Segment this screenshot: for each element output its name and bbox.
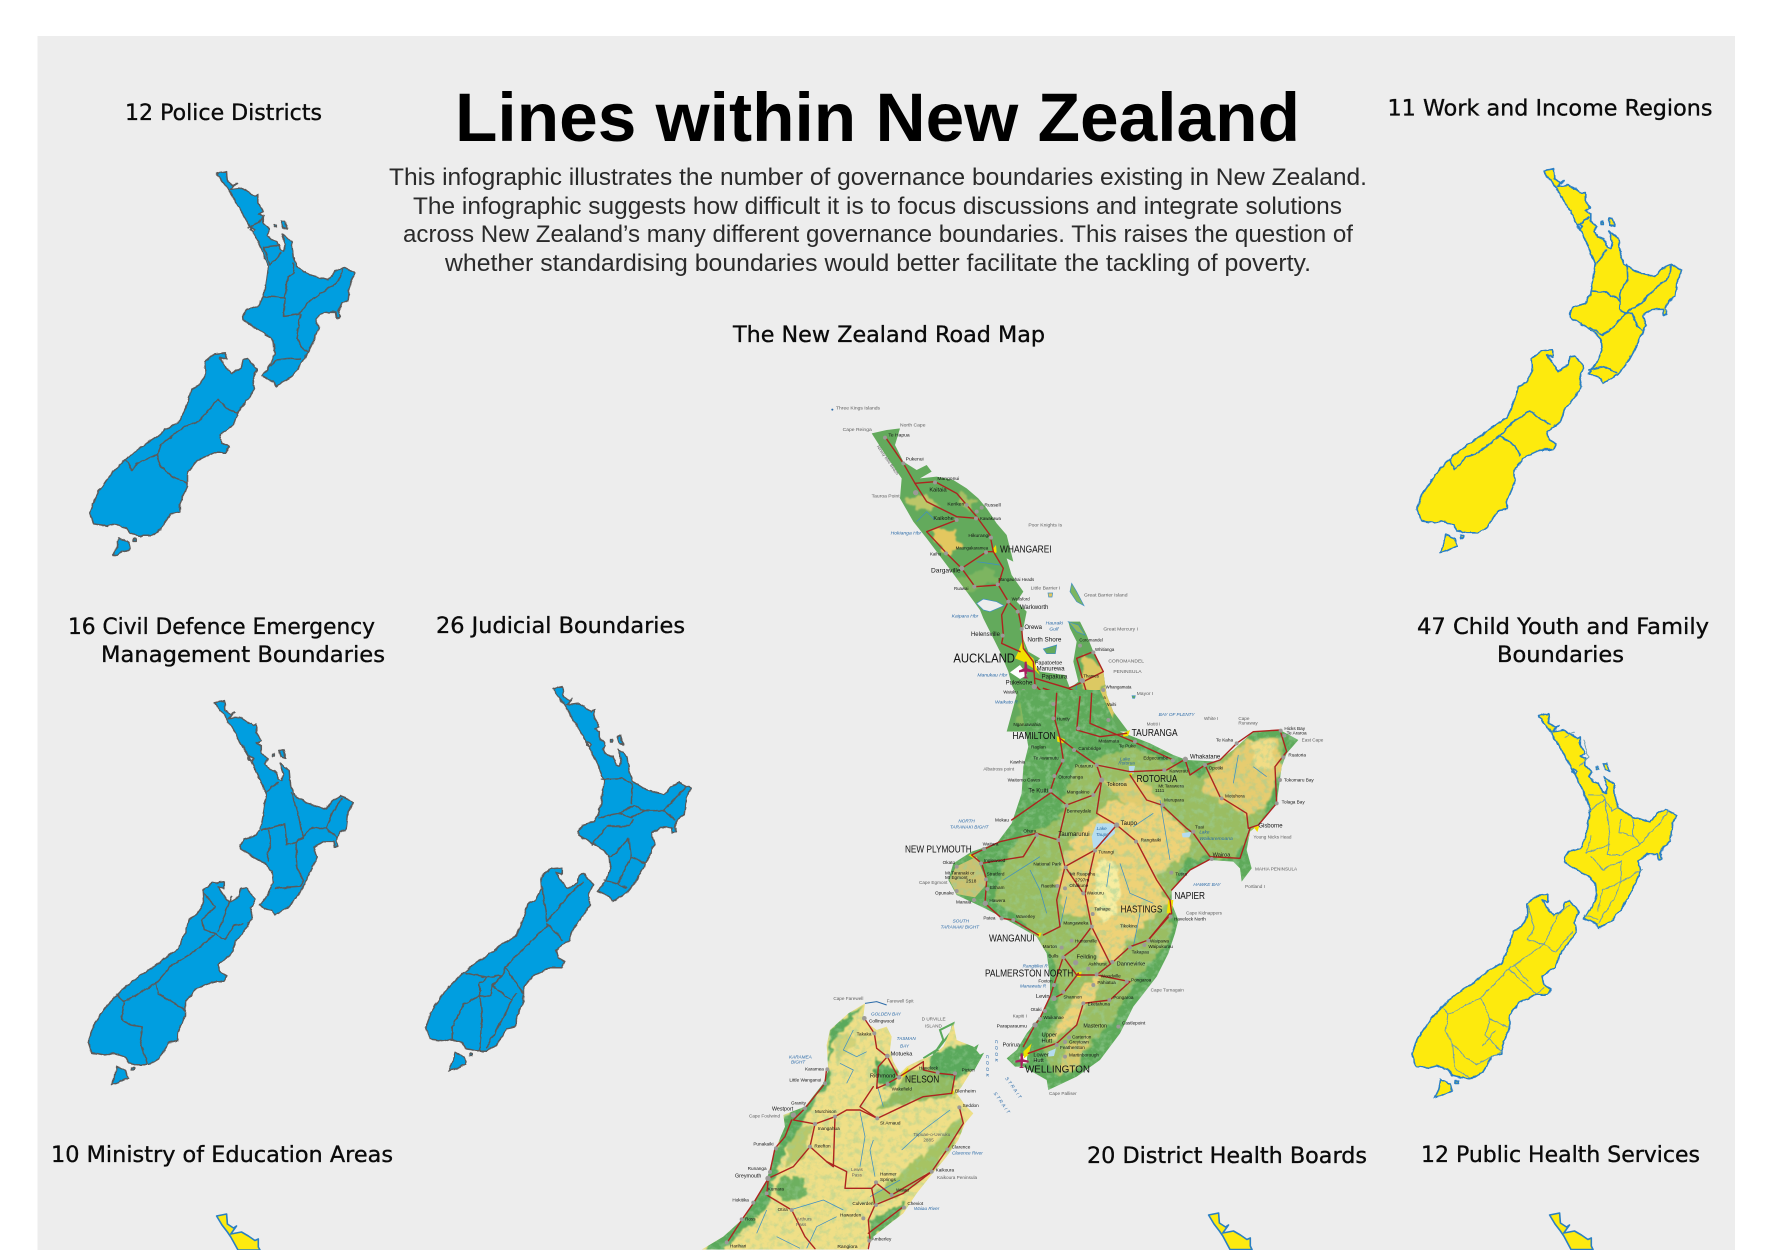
central place names: Taupo bbox=[1121, 821, 1138, 827]
central place names: Havelock North bbox=[1174, 916, 1206, 921]
north place names: Papatoetoe bbox=[1035, 661, 1062, 667]
central place names: National Park bbox=[1033, 862, 1062, 867]
north place names: Pukenui bbox=[906, 457, 924, 463]
north place names: Te Kauwhata bbox=[1052, 697, 1077, 702]
north place names: Coromandel bbox=[1079, 638, 1103, 643]
north place names: North Shore bbox=[1027, 637, 1062, 644]
south place names: Lewis bbox=[851, 1167, 864, 1172]
rivers bbox=[757, 1030, 950, 1248]
central place names: White I bbox=[1204, 716, 1218, 721]
north place names: Cape Reinga bbox=[843, 427, 872, 433]
central place names: ROTORUA bbox=[1137, 774, 1178, 785]
north place names: Tauroa Point bbox=[872, 494, 900, 500]
central place names: Mangakino bbox=[1067, 789, 1090, 794]
central place names: Mangaweka bbox=[1063, 921, 1089, 926]
central place names: Inglewood bbox=[984, 858, 1006, 863]
central place names: Eketahuna bbox=[1088, 1001, 1110, 1006]
north place names: Hikurangi bbox=[968, 533, 989, 539]
central place names: Taumarunui bbox=[1058, 832, 1090, 838]
label: child youth and family boundaries: Boundaries bbox=[1497, 642, 1624, 668]
icon: Wellington airport plane bbox=[1015, 1053, 1029, 1068]
south place names: Harihari bbox=[730, 1244, 746, 1249]
north place names: Paeroa bbox=[1092, 695, 1106, 700]
south place names: GOLDEN BAY bbox=[871, 1012, 902, 1017]
central place names: Tokoroa bbox=[1107, 782, 1128, 788]
south place names: Wakefield bbox=[892, 1086, 912, 1091]
south place names: Pass bbox=[852, 1173, 863, 1178]
intro text block: across New Zealand’s many different governance boundaries. This raises the question of bbox=[403, 221, 1353, 248]
south place names: D URVILLE bbox=[922, 1017, 946, 1022]
south place names: Inangahua bbox=[818, 1126, 840, 1131]
central place names: Paraparaumu bbox=[997, 1024, 1027, 1030]
central place names: Runaway bbox=[1238, 720, 1258, 725]
map: district health boards (cut off by page edge) bbox=[1209, 1213, 1252, 1250]
south place names: Kumara bbox=[768, 1187, 784, 1192]
central place names: Bulls bbox=[1048, 954, 1059, 959]
central place names: Te Kaha bbox=[1216, 738, 1233, 743]
central place names: Mokau bbox=[995, 818, 1009, 823]
central place names: Masterton bbox=[1083, 1024, 1107, 1030]
north place names: Kaitaia bbox=[929, 488, 947, 494]
north place names: Whitianga bbox=[1095, 647, 1115, 652]
south roads bbox=[727, 1018, 963, 1249]
south place names: Amberley bbox=[872, 1237, 892, 1242]
label: civil defence emergency management boundaries: 16 Civil Defence Emergency bbox=[68, 614, 375, 640]
central place names: Lower bbox=[1033, 1052, 1049, 1058]
south place names: TASMAN bbox=[897, 1036, 916, 1041]
south place names: Motueka bbox=[891, 1052, 913, 1058]
central place names: Opunake bbox=[935, 890, 954, 895]
north place names: Gulf bbox=[1049, 627, 1059, 633]
north place names: Warkworth bbox=[1020, 605, 1048, 611]
south place names: Havelock bbox=[919, 1065, 939, 1070]
central place names: Ngaruawahia bbox=[1013, 722, 1041, 727]
central place names: Marton bbox=[1043, 944, 1058, 949]
north place names: Whangamata bbox=[1106, 684, 1132, 689]
north place names: Ruawai bbox=[954, 586, 968, 591]
north place names: Te Hapua bbox=[888, 433, 910, 439]
icon: Auckland airport plane bbox=[1019, 662, 1033, 678]
terrain texture bbox=[933, 687, 1307, 1100]
north place names: Orewa bbox=[1024, 625, 1043, 631]
central place names: Portland I bbox=[1245, 884, 1265, 889]
central place names: Motuhora bbox=[1225, 793, 1245, 798]
label: district health boards: 20 District Health Boards bbox=[1087, 1143, 1367, 1169]
label: work and income regions: 11 Work and Income Regions bbox=[1388, 96, 1712, 122]
south place names: KARAMEA bbox=[789, 1054, 812, 1059]
central place names: Turangi bbox=[1098, 850, 1114, 855]
central place names: Waikanae bbox=[1043, 1015, 1064, 1020]
central place names: Ohura bbox=[1023, 828, 1037, 833]
south place names: Blenheim bbox=[955, 1089, 976, 1095]
central place names: Cape bbox=[1238, 716, 1250, 721]
north place names: Kerikeri bbox=[947, 502, 964, 508]
north place names: Waihi bbox=[1106, 702, 1116, 707]
central place names: Cape Egmont bbox=[919, 880, 948, 885]
central place names: MAHIA PENINSULA bbox=[1255, 866, 1298, 871]
map: public health services (cut off by page edge) bbox=[1550, 1213, 1593, 1250]
north place names: Great Barrier Island bbox=[1084, 592, 1128, 598]
north place names: Little Barrier I bbox=[1031, 586, 1060, 592]
south place names: Rangiora bbox=[837, 1244, 858, 1250]
central place names: BAY OF PLENTY bbox=[1159, 712, 1196, 717]
map: judicial boundaries bbox=[426, 687, 691, 1071]
road map: southern North Island bbox=[905, 687, 1324, 1116]
central place names: Waipukurau bbox=[1148, 944, 1173, 949]
central place names: Tolaga Bay bbox=[1282, 799, 1305, 804]
central place names: NORTH bbox=[958, 819, 975, 824]
label: police districts: 12 Police Districts bbox=[125, 100, 322, 126]
north place names: Kaikohe bbox=[933, 516, 954, 522]
map: police districts bbox=[90, 172, 355, 556]
south place names: Runanga bbox=[748, 1166, 767, 1171]
south urban areas bbox=[902, 1067, 954, 1095]
map waters and islands bbox=[831, 409, 1135, 698]
central place names: COOK bbox=[985, 1055, 990, 1079]
south place names: BIGHT bbox=[791, 1059, 806, 1064]
south place names: Seddon bbox=[963, 1103, 979, 1108]
central place names: Porirua bbox=[1003, 1043, 1020, 1049]
south place names: Punakaiki bbox=[753, 1142, 774, 1147]
south place names: Culverden bbox=[852, 1201, 874, 1206]
central place names: Matamata bbox=[1098, 739, 1119, 744]
central place names: Hicks Bay bbox=[1284, 726, 1306, 731]
central place names: COOK bbox=[994, 1040, 999, 1064]
south place names: Takaka bbox=[857, 1031, 872, 1036]
central place names bbox=[905, 712, 1324, 1116]
central place names: Tutira bbox=[1175, 872, 1187, 877]
north place names bbox=[836, 406, 1153, 721]
central place names: 1111 bbox=[1155, 788, 1165, 793]
south place names: Greymouth bbox=[735, 1173, 761, 1179]
label: judicial boundaries: 26 Judicial Boundaries bbox=[436, 613, 685, 639]
central place names: Motiti I bbox=[1147, 721, 1160, 726]
south place names: Collingwood bbox=[869, 1018, 895, 1023]
Farewell Spit bbox=[865, 1002, 887, 1005]
south place names: Westport bbox=[772, 1106, 794, 1112]
north place names: AUCKLAND bbox=[953, 651, 1015, 665]
label: ministry of education areas: 10 Ministry of Education Areas bbox=[51, 1142, 393, 1168]
central place names: Te Awamutu bbox=[1033, 755, 1059, 760]
north place names: Helensville bbox=[971, 632, 1001, 638]
north place names: Manukau Hbr bbox=[977, 672, 1008, 678]
central place names: Ashhurst bbox=[1088, 961, 1107, 966]
north place names: Russell bbox=[984, 503, 1001, 509]
north place names: Waikato R bbox=[995, 699, 1018, 705]
north place names: Poor Knights Is bbox=[1028, 523, 1063, 529]
south place names: Ross bbox=[745, 1217, 756, 1222]
central place names: Upper bbox=[1042, 1033, 1057, 1039]
road map of New Zealand bbox=[697, 406, 1324, 1250]
central place names: Te Puke bbox=[1119, 744, 1136, 749]
road map: northern South Island bbox=[697, 996, 983, 1250]
central place names: Tuai bbox=[1195, 824, 1204, 829]
south place names: BAY bbox=[900, 1044, 910, 1049]
label: child youth and family boundaries: 47 Child Youth and Family bbox=[1417, 614, 1709, 640]
central place names: East Cape bbox=[1302, 738, 1324, 743]
south place names: Kaikoura bbox=[936, 1168, 954, 1173]
heading: road map: The New Zealand Road Map bbox=[732, 322, 1045, 348]
central place names: Feilding bbox=[1077, 955, 1096, 961]
central place names: Lake bbox=[1199, 829, 1210, 834]
north place names: Ninety Mile Beach bbox=[876, 444, 900, 476]
south place names: Karamea bbox=[805, 1067, 824, 1072]
central place names: Otaki bbox=[1031, 1007, 1042, 1012]
central place names: Murupara bbox=[1164, 798, 1184, 803]
north place names: WHANGAREI bbox=[1000, 545, 1052, 556]
central place names: Takapau bbox=[1132, 950, 1150, 955]
title: Lines within New Zealand bbox=[455, 79, 1300, 156]
central place names: HASTINGS bbox=[1121, 905, 1163, 916]
label: civil defence emergency management boundaries: Management Boundaries bbox=[101, 642, 385, 668]
south place names: Clarence River bbox=[952, 1150, 983, 1155]
central place names: Te Araroa bbox=[1287, 731, 1307, 736]
central place names: Waiouru bbox=[1087, 891, 1104, 896]
central place names: Waipawa bbox=[1150, 938, 1169, 943]
south place names: Springs bbox=[880, 1177, 896, 1182]
central place names: NAPIER bbox=[1174, 891, 1205, 902]
central place names: Patea bbox=[983, 916, 996, 921]
central place names: Castlepoint bbox=[1122, 1021, 1146, 1026]
central place names: Huntly bbox=[1057, 717, 1071, 722]
south town markers bbox=[725, 1016, 961, 1244]
central place names: Gisborne bbox=[1258, 823, 1283, 829]
central place names: TAURANGA bbox=[1132, 728, 1178, 739]
south place names: Hanmer bbox=[880, 1171, 897, 1176]
north place names: Mayor I bbox=[1137, 691, 1153, 697]
central place names: Featherston bbox=[1060, 1045, 1085, 1050]
south place names: Kaikoura Peninsula bbox=[937, 1175, 978, 1180]
north place names: Kaihu bbox=[930, 552, 942, 557]
central place names: Pongaroa bbox=[1131, 978, 1152, 983]
central place names: Hutt bbox=[1033, 1058, 1044, 1064]
south place names: Picton bbox=[962, 1068, 975, 1073]
central place names: Rangitikei R bbox=[1023, 964, 1048, 969]
central place names: Mt Taranaki or bbox=[945, 870, 975, 875]
central place names: Waikaremoana bbox=[1199, 836, 1233, 842]
central place names: Greytown bbox=[1069, 1040, 1089, 1045]
label: public health services: 12 Public Health Services bbox=[1421, 1142, 1700, 1168]
south place names: Farewell Spit bbox=[887, 999, 914, 1004]
central place names: Whakatane bbox=[1190, 754, 1221, 760]
north place names: Manurewa bbox=[1037, 666, 1065, 672]
central place names: Benneydale bbox=[1067, 809, 1092, 814]
central place names: Raetihi bbox=[1041, 884, 1055, 889]
map: child youth and family boundaries bbox=[1412, 714, 1677, 1098]
central place names: Cape Palliser bbox=[1049, 1091, 1077, 1096]
central place names: Waverley bbox=[1016, 914, 1036, 919]
intro text block bbox=[389, 164, 1367, 277]
central place names: SOUTH bbox=[953, 919, 970, 924]
south place names: Little Wanganui bbox=[789, 1077, 821, 1082]
central place names: Dannevirke bbox=[1117, 961, 1145, 967]
central place names: Kawhia bbox=[1010, 759, 1026, 764]
Marlborough Sounds bbox=[923, 1023, 982, 1070]
central place names: Waitara bbox=[983, 842, 999, 847]
north place names: Maungakaramea bbox=[956, 546, 989, 551]
central place names: Levin bbox=[1036, 994, 1050, 1000]
south place names: Waiau bbox=[896, 1187, 909, 1192]
central place names: Shannon bbox=[1063, 994, 1082, 999]
south place names: Murchison bbox=[815, 1109, 837, 1114]
central place names: Tikokino bbox=[1120, 923, 1138, 928]
south place names: 2885 bbox=[923, 1138, 934, 1143]
central place names: Foxton bbox=[1038, 979, 1053, 984]
central place names: HAMILTON bbox=[1012, 731, 1056, 742]
map: ministry of education areas (cut off by page edge) bbox=[217, 1214, 260, 1250]
north place names: Great Mercury I bbox=[1103, 627, 1138, 633]
central place names: STRAIT bbox=[1004, 1076, 1024, 1101]
central place names: Okato bbox=[943, 860, 955, 865]
intro text block: whether standardising boundaries would better facilitate the tackling of poverty. bbox=[444, 250, 1311, 277]
central place names: Manaia bbox=[956, 900, 972, 905]
Auckland urban area bbox=[1015, 638, 1040, 675]
south place names: Hokitika bbox=[732, 1198, 749, 1203]
south place names: Cape Farewell bbox=[833, 996, 863, 1001]
north place names: COROMANDEL bbox=[1108, 659, 1144, 665]
central place names: Mt Egmont bbox=[945, 875, 968, 880]
central place names: Kawerau bbox=[1169, 769, 1188, 774]
central place names: Otorohanga bbox=[1058, 775, 1083, 780]
south place names: Cape Foulwind bbox=[749, 1114, 780, 1119]
central roads bbox=[972, 693, 1287, 1053]
intro text block: The infographic suggests how difficult it is to focus discussions and integrate solutions bbox=[413, 193, 1342, 220]
central place names: Hawera bbox=[989, 898, 1006, 903]
central place names: Raglan bbox=[1031, 744, 1046, 749]
central place names: Cambridge bbox=[1078, 746, 1102, 751]
central place names: HAWKE BAY bbox=[1193, 882, 1221, 887]
central place names: PALMERSTON NORTH bbox=[985, 969, 1073, 980]
central place names: Ohakune bbox=[1069, 883, 1089, 888]
south place names: NELSON bbox=[905, 1074, 939, 1085]
south place names: Arthurs bbox=[797, 1217, 812, 1222]
north place names: Hauraki bbox=[1046, 620, 1064, 626]
central place names: Cape Turnagain bbox=[1151, 988, 1184, 993]
north place names: Three Kings Islands bbox=[836, 406, 881, 412]
south place names: Reefton bbox=[814, 1144, 831, 1149]
north place names: Papakura bbox=[1042, 674, 1068, 680]
south place names: Granity bbox=[791, 1100, 807, 1105]
central place names: Manawatu R bbox=[1020, 984, 1047, 989]
urban areas bbox=[968, 730, 1259, 1058]
central place names: Pahiatua bbox=[1097, 980, 1116, 985]
central place names: Hutt bbox=[1042, 1039, 1052, 1045]
central place names: Young Nicks Head bbox=[1253, 835, 1292, 840]
central place names: Hunterville bbox=[1075, 939, 1097, 944]
central place names: Mt Tarawera bbox=[1158, 783, 1184, 788]
central place names: Putaruru bbox=[1075, 764, 1093, 769]
north place names: Dargaville bbox=[931, 568, 961, 575]
central place names: Carterton bbox=[1072, 1035, 1092, 1040]
north place names: Kawakawa bbox=[980, 516, 1002, 521]
north place names: Huntly bbox=[1057, 716, 1071, 721]
central place names: Lake bbox=[1120, 757, 1131, 762]
north place names: North Cape bbox=[900, 423, 926, 429]
north town markers bbox=[883, 436, 1110, 722]
north place names: Mangawhai Heads bbox=[998, 577, 1034, 582]
central place names: Cape Kidnappers bbox=[1186, 910, 1223, 915]
central place names: TARANAKI BIGHT bbox=[941, 924, 980, 929]
north place names: Te Aroha bbox=[1072, 710, 1089, 715]
lakes and Wellington harbour bbox=[1019, 766, 1192, 1063]
central place names: Martinborough bbox=[1069, 1053, 1099, 1058]
label: child youth and family boundaries bbox=[1417, 614, 1709, 668]
central place names: Eltham bbox=[990, 885, 1005, 890]
north place names: Pukekohe bbox=[1006, 680, 1033, 686]
central place names: Opotiki bbox=[1209, 765, 1223, 770]
north place names: Mangonui bbox=[937, 476, 959, 482]
south place names: Clarence bbox=[952, 1145, 971, 1150]
central place names: Rangitaiki bbox=[1141, 838, 1161, 843]
south place names: Richmond bbox=[870, 1074, 895, 1080]
rivers bbox=[1003, 755, 1267, 947]
terrain texture bbox=[697, 1000, 980, 1250]
north place names: Hokianga Hbr bbox=[891, 530, 921, 536]
north place names: PENINSULA bbox=[1113, 669, 1142, 675]
central town markers bbox=[955, 702, 1286, 1059]
central place names: Te Kuiti bbox=[1028, 789, 1048, 795]
north roads bbox=[885, 437, 1108, 725]
central place names: Mt Ruapehu bbox=[1070, 871, 1096, 876]
map: civil defence boundaries bbox=[88, 701, 353, 1085]
central place names: 2797m bbox=[1075, 877, 1089, 882]
south place names: Otira bbox=[778, 1207, 788, 1212]
central place names: Woodville bbox=[1101, 973, 1121, 978]
south place names bbox=[730, 996, 983, 1250]
central place names: STRAIT bbox=[993, 1091, 1012, 1116]
central place names: TARANAKI BIGHT bbox=[950, 825, 990, 830]
central place names: Albatross point bbox=[983, 767, 1015, 772]
central place names: Edgecumbe bbox=[1143, 756, 1169, 761]
label: civil defence emergency management boundaries bbox=[68, 614, 385, 668]
central place names: WANGANUI bbox=[989, 934, 1035, 945]
south place names: ISLAND bbox=[925, 1023, 942, 1028]
central place names: Stratford bbox=[987, 871, 1005, 876]
map: work and income regions bbox=[1417, 169, 1682, 553]
central place names: Wairoa bbox=[1213, 853, 1231, 859]
intro text block: This infographic illustrates the number of governance boundaries existing in New Zealand. bbox=[389, 164, 1367, 191]
south place names: Cheviot bbox=[907, 1201, 924, 1206]
south place names: Waiau River bbox=[914, 1206, 940, 1211]
north place names: Wellsford bbox=[1012, 597, 1030, 602]
south place names: Pass bbox=[796, 1222, 807, 1227]
south place names: Hawarden bbox=[840, 1213, 862, 1218]
road map: northern North Island bbox=[831, 406, 1153, 738]
central place names: 2518 bbox=[966, 879, 977, 884]
central place names: Rotorua bbox=[1118, 761, 1135, 766]
north place names: Waiuku bbox=[1003, 689, 1018, 694]
north place names: Thames bbox=[1083, 674, 1099, 679]
central place names: Waitomo Caves bbox=[1008, 778, 1041, 783]
central place names: Tokomaru Bay bbox=[1284, 778, 1314, 783]
central place names: WELLINGTON bbox=[1025, 1065, 1090, 1076]
central place names: Ruatoria bbox=[1288, 753, 1306, 758]
north place names: Kaipara Hbr bbox=[952, 613, 979, 619]
central place names: Pongaroa bbox=[1113, 995, 1134, 1000]
central place names: Taihape bbox=[1094, 907, 1111, 912]
central place names: Kapiti I bbox=[1013, 1013, 1027, 1018]
south place names: St Arnaud bbox=[880, 1120, 901, 1125]
central place names: Taupo bbox=[1096, 832, 1109, 837]
central place names: Lake bbox=[1097, 826, 1107, 831]
central place names: NEW PLYMOUTH bbox=[905, 845, 972, 856]
south place names: Tapuae-o-Uenuku bbox=[913, 1132, 951, 1137]
